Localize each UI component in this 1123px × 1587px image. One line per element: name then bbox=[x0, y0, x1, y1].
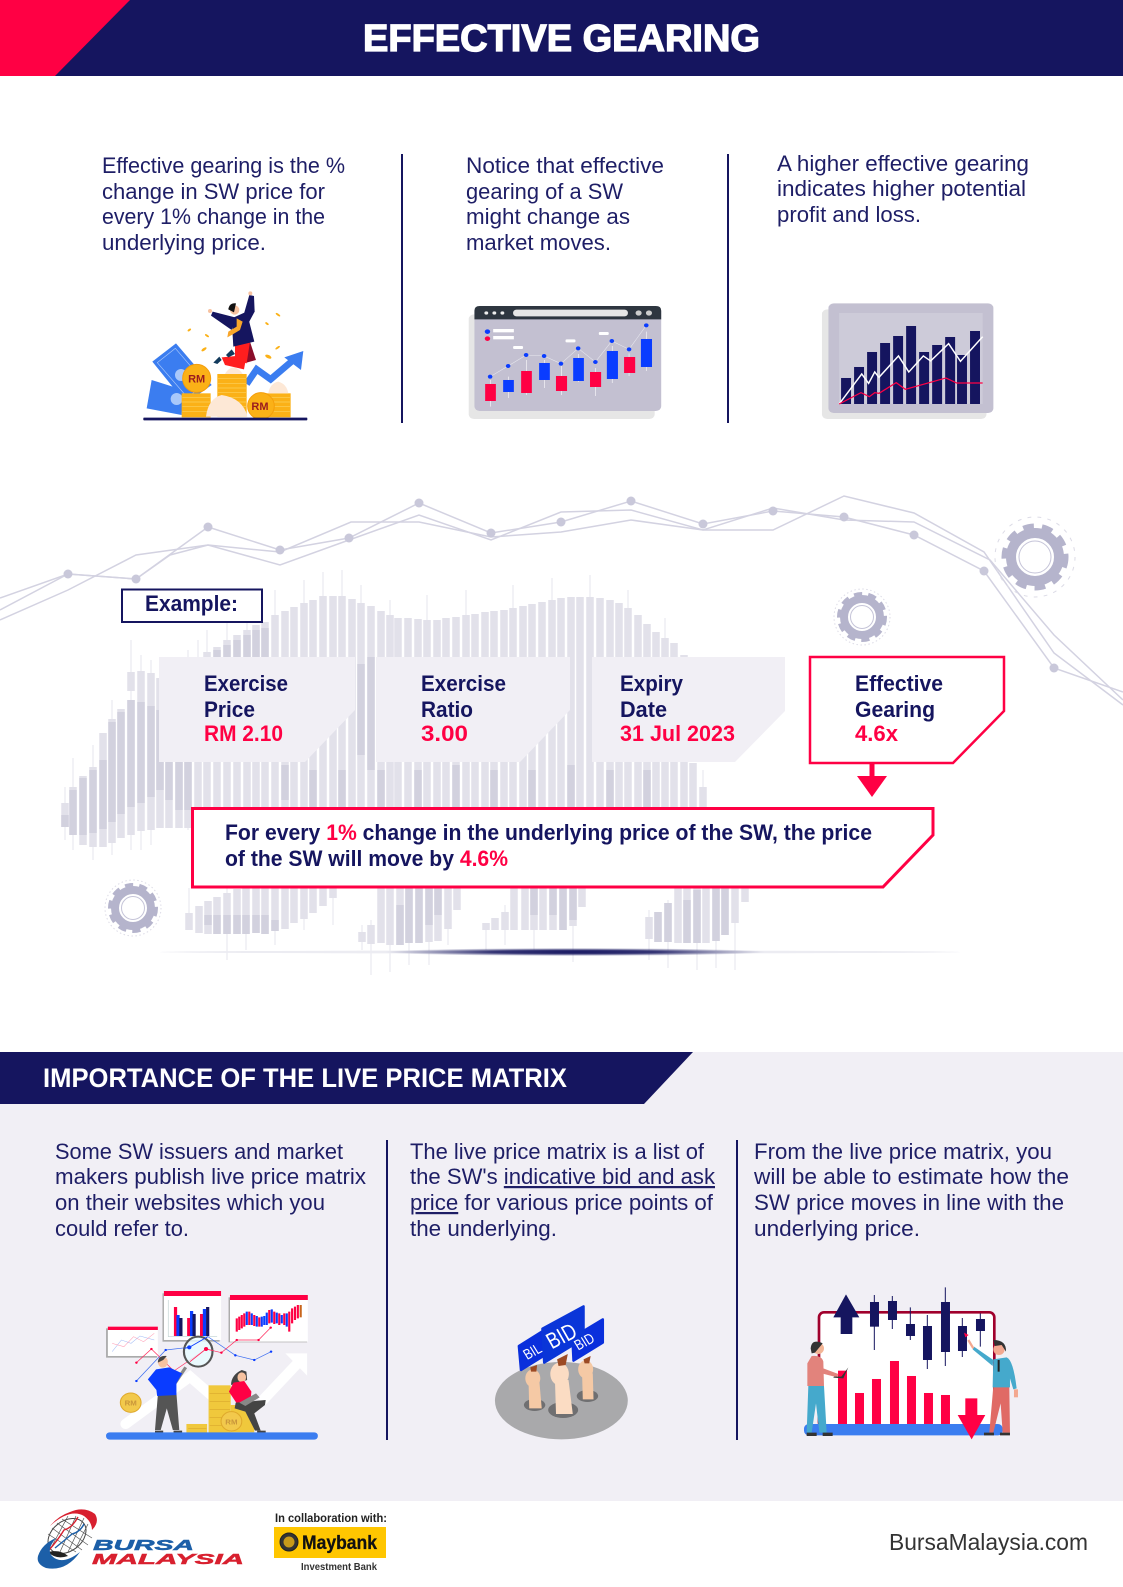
text block: higher gearing: profit and loss. bbox=[777, 202, 921, 227]
text block: where to find: Some SW issuers and market bbox=[55, 1139, 343, 1164]
text block: what it is: the underlying. bbox=[410, 1216, 557, 1241]
panel: exercise ratio: 3.00 bbox=[421, 721, 468, 746]
icon: people analysing charts: RM bbox=[125, 1399, 137, 1408]
text block: gearing changes: gearing of a SW bbox=[466, 179, 623, 204]
title: EFFECTIVE GEARING bbox=[363, 18, 760, 60]
icon: people analysing charts: RM bbox=[225, 1418, 238, 1426]
logo: Maybank collaboration bbox=[274, 1513, 387, 1573]
logo: Maybank collaboration: In collaboration with: bbox=[275, 1513, 387, 1525]
icon: hands holding bid signs: BID bbox=[542, 1319, 582, 1354]
logo: Bursa Malaysia bbox=[38, 1509, 244, 1569]
panel: live price matrix section bbox=[0, 1052, 1123, 1501]
text block: where to find: makers publish live price matrix bbox=[55, 1164, 366, 1189]
callout: result bbox=[192, 808, 933, 887]
text block: definition: every 1% change in the bbox=[102, 204, 325, 229]
text block: where to find: could refer to. bbox=[55, 1216, 189, 1241]
icon: hands holding bid signs bbox=[495, 1306, 628, 1439]
label: example bbox=[122, 590, 262, 622]
panel: expiry date: 31 Jul 2023 bbox=[620, 721, 735, 746]
text block: what it is: price for various price points of bbox=[410, 1190, 714, 1215]
icon: large gear bbox=[995, 517, 1075, 597]
text block: gearing changes: might change as bbox=[466, 204, 630, 229]
icon: hands holding bid signs: BIL bbox=[520, 1340, 545, 1363]
panel: exercise price: Exercise bbox=[204, 671, 288, 696]
text block: gearing changes: Notice that effective bbox=[466, 153, 664, 178]
header banner bbox=[0, 0, 1123, 76]
candle shaded centres bbox=[65, 628, 725, 945]
icon: small gear bbox=[105, 880, 161, 936]
text block: what it is: the SW's indicative bid and ask bbox=[410, 1164, 716, 1189]
icon: browser candlestick chart bbox=[469, 306, 661, 419]
icon: jumping investor with coins: RM bbox=[251, 401, 269, 413]
panel: effective gearing bbox=[810, 657, 1004, 763]
panel: effective gearing: Gearing bbox=[855, 697, 935, 722]
panel: effective gearing: 4.6x bbox=[855, 721, 899, 746]
icon: presenters with candlestick board bbox=[804, 1287, 1018, 1439]
logo: Maybank collaboration: Investment Bank bbox=[301, 1561, 377, 1573]
logo: Bursa Malaysia: MALAYSIA bbox=[92, 1551, 244, 1568]
icon: jumping investor with coins bbox=[143, 291, 307, 420]
candle bodies bbox=[65, 596, 745, 945]
panel: expiry date bbox=[592, 657, 785, 762]
text block: definition: change in SW price for bbox=[102, 179, 325, 204]
text block: how to use: From the live price matrix, you bbox=[754, 1139, 1052, 1164]
background: candlestick map and network lines bbox=[0, 496, 1123, 975]
text block: how to use: underlying price. bbox=[754, 1216, 920, 1241]
icon: bar and line chart panel bbox=[822, 303, 993, 419]
logo: Maybank collaboration: Maybank bbox=[302, 1533, 377, 1554]
section banner bbox=[0, 1052, 693, 1104]
candle wicks bbox=[65, 570, 735, 975]
text block: where to find: on their websites which you bbox=[55, 1190, 325, 1215]
text block: how to use: SW price moves in line with the bbox=[754, 1190, 1064, 1215]
chart line dots bbox=[64, 496, 1058, 672]
icon: medium gear bbox=[834, 589, 890, 645]
panel: exercise ratio: Exercise bbox=[421, 671, 506, 696]
panel: exercise ratio bbox=[376, 657, 570, 762]
icon: people analysing charts bbox=[106, 1291, 318, 1440]
text block: how to use: will be able to estimate how the bbox=[753, 1164, 1069, 1189]
callout: result: of the SW will move by 4.6% bbox=[225, 846, 508, 871]
panel: effective gearing: Effective bbox=[855, 671, 943, 696]
logo globe bbox=[38, 1509, 97, 1569]
label: example: Example: bbox=[145, 591, 238, 616]
panel: expiry date: Expiry bbox=[620, 671, 684, 696]
text block: gearing changes: market moves. bbox=[466, 230, 611, 255]
arrow: gearing to callout bbox=[857, 763, 887, 797]
text block: what it is: The live price matrix is a list of bbox=[410, 1139, 705, 1164]
logo wordmark: BURSA bbox=[93, 1537, 194, 1554]
icon: jumping investor with coins: RM bbox=[188, 374, 205, 386]
panel: expiry date: Date bbox=[620, 697, 667, 722]
text block: what it is bbox=[410, 1139, 716, 1241]
chart lines bbox=[0, 496, 1123, 705]
panel: exercise price bbox=[159, 657, 355, 762]
text block: higher gearing: indicates higher potential bbox=[777, 176, 1026, 201]
panel: exercise ratio: Ratio bbox=[421, 697, 473, 722]
icon: hands holding bid signs: BID bbox=[571, 1330, 598, 1353]
ground shadow bbox=[160, 948, 960, 956]
text block: definition: underlying price. bbox=[102, 230, 266, 255]
callout: result: For every 1% change in the underlying price of the SW, the price bbox=[225, 820, 872, 845]
section heading: IMPORTANCE OF THE LIVE PRICE MATRIX bbox=[43, 1063, 567, 1093]
panel: exercise price: Price bbox=[204, 697, 255, 722]
footer website: BursaMalaysia.com bbox=[889, 1529, 1088, 1555]
panel: exercise price: RM 2.10 bbox=[204, 721, 283, 746]
text block: higher gearing: A higher effective gearing bbox=[777, 151, 1029, 176]
text block: definition: Effective gearing is the % bbox=[102, 153, 345, 178]
